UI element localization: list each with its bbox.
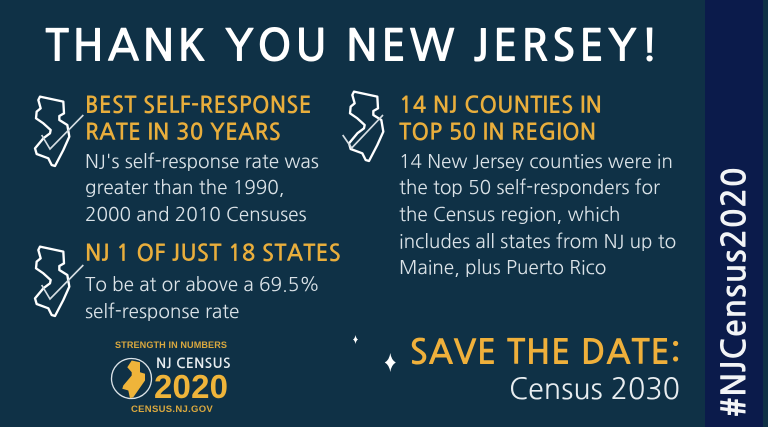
callout heading: SAVE THE DATE:	[410, 336, 681, 370]
heading: 14 counties: 14 NJ COUNTIES IN	[399, 95, 602, 117]
icon: large star	[385, 353, 396, 372]
heading line 2: RATE IN 30 YEARS	[85, 122, 281, 144]
callout subheading: Census 2030	[509, 376, 680, 404]
panel: 1 of 18 states	[85, 243, 341, 321]
panel: best self-response	[85, 95, 319, 224]
text line 3: 2000 and 2010 Censuses	[85, 205, 306, 224]
heading: 1 of just 18 states: NJ 1 OF JUST 18 STATES	[85, 243, 341, 265]
text: at or above: To be at or above a 69.5%	[85, 275, 320, 294]
logo 2020: 2020	[154, 368, 228, 405]
panel: 14 counties	[399, 95, 676, 277]
heading: best self-response: BEST SELF-RESPONSE	[85, 95, 312, 117]
logo emblem	[110, 358, 152, 400]
icon: NJ outline check 3	[343, 92, 383, 161]
text line 3: the Census region, which	[399, 205, 620, 224]
text line 2: the top 50 self-responders for	[399, 178, 660, 196]
text line 4: includes all states from NJ up to	[399, 232, 676, 251]
logo URL: CENSUS.NJ.GOV	[131, 404, 213, 415]
logo: NJ Census 2020	[110, 340, 231, 415]
text: counties line 1: 14 New Jersey counties were in	[399, 152, 673, 170]
text line 2: self-response rate	[85, 302, 239, 321]
icon: NJ outline check 1	[35, 97, 83, 166]
text line 2: greater than the 1990,	[85, 178, 284, 196]
sidebar	[705, 0, 763, 427]
logo tagline: STRENGTH IN NUMBERS	[115, 340, 227, 350]
callout: save the date	[410, 336, 681, 404]
icon: small star	[353, 335, 358, 344]
title: THANK YOU NEW JERSEY!	[45, 24, 662, 68]
sidebar hashtag: #NJCensus2020	[718, 167, 750, 417]
text line 5: Maine, plus Puerto Rico	[399, 258, 606, 277]
icon: NJ outline check 2	[35, 247, 83, 316]
logo NJ Census: NJ CENSUS	[156, 357, 231, 371]
heading line 2: TOP 50 IN REGION	[399, 122, 596, 144]
text: self-response description: NJ's self-response rate was	[85, 152, 319, 170]
